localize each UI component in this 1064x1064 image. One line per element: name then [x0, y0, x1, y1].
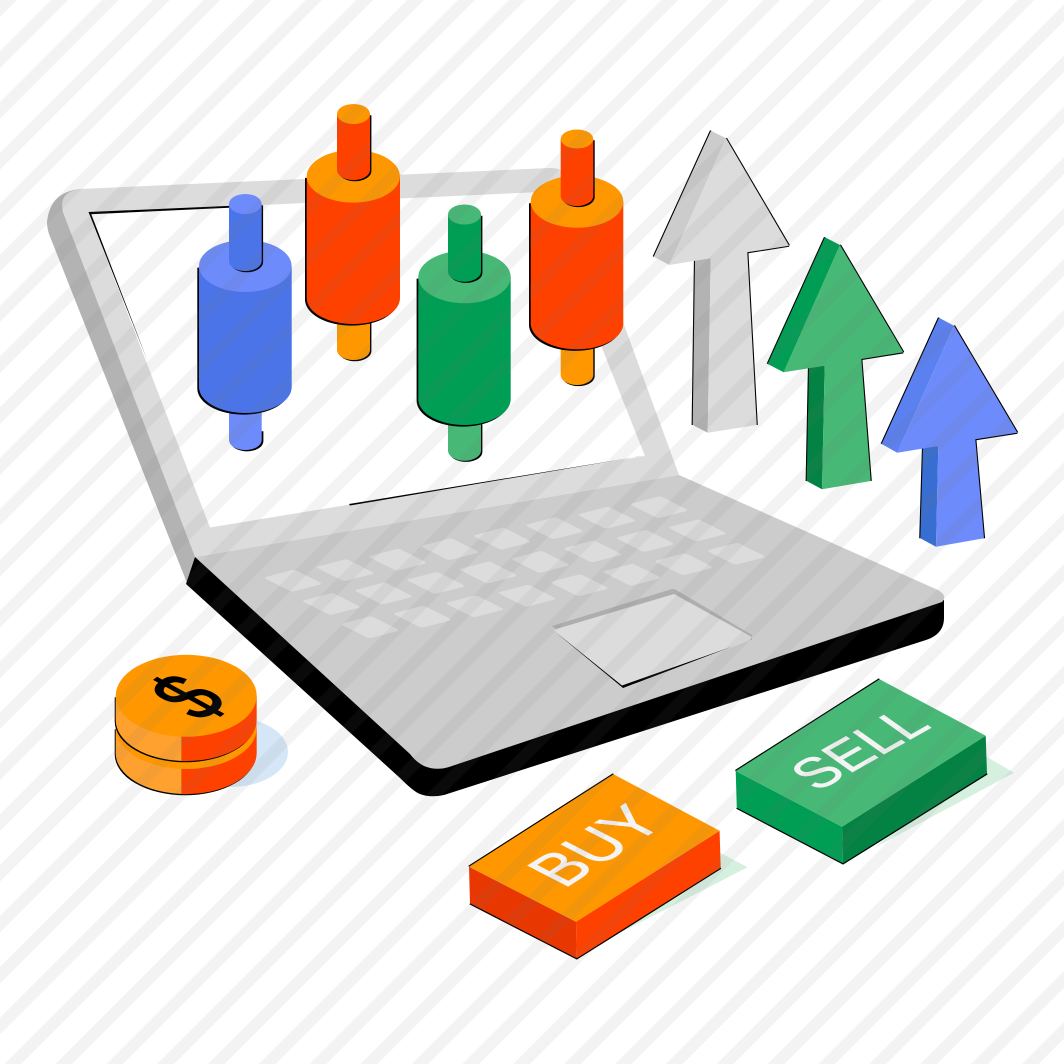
sell label: SELL — [777, 698, 943, 799]
blue up arrow — [882, 318, 1017, 547]
red candlestick left — [305, 104, 400, 361]
sell shadow — [874, 757, 1014, 848]
laptop lid — [47, 168, 679, 583]
coin shadow — [172, 717, 288, 787]
green up arrow — [768, 237, 903, 489]
buy label: BUY — [512, 796, 680, 896]
coin stack — [115, 655, 288, 795]
red candlestick right — [529, 130, 623, 386]
keyboard — [265, 496, 764, 638]
sell button — [736, 679, 1014, 863]
laptop base — [186, 475, 944, 796]
buy button — [469, 774, 748, 958]
green candlestick — [417, 204, 511, 462]
buy shadow — [610, 853, 748, 938]
dollar sign: $ — [128, 661, 247, 732]
blue candlestick — [197, 194, 292, 451]
touchpad — [552, 589, 752, 688]
grey up arrow — [654, 131, 789, 433]
laptop — [47, 168, 944, 796]
